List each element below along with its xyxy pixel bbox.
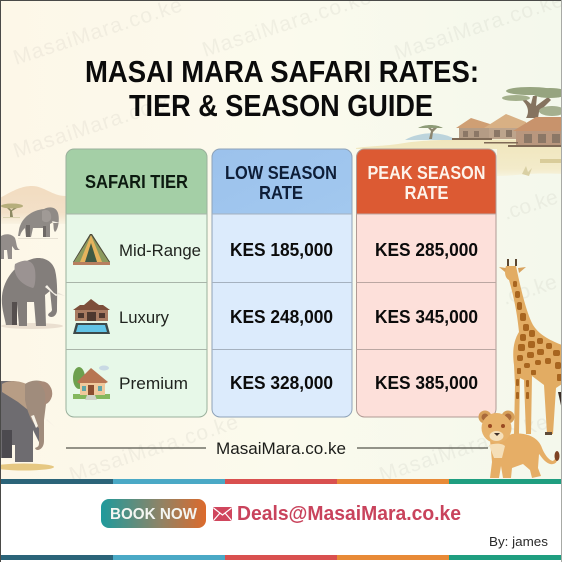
author credit: By: james <box>489 535 548 549</box>
label: luxury: Luxury <box>119 308 169 327</box>
illustration: far elephant <box>18 207 60 239</box>
icon: tent <box>73 234 110 265</box>
title: MASAI MARA SAFARI RATES: <box>85 54 479 89</box>
illustration: lodges and savanna <box>356 87 562 176</box>
heading: peak season rate <box>368 163 486 203</box>
low season prices: KES 185,000 <box>230 240 333 260</box>
heading: low season rate <box>225 163 337 203</box>
color strip: top of footer <box>0 479 562 484</box>
contact email: Deals@MasaiMara.co.ke <box>237 503 461 525</box>
peak season prices: KES 345,000 <box>375 307 478 327</box>
panel: low season column <box>212 149 352 417</box>
button: book now: BOOK NOW <box>110 506 197 523</box>
illustration: giraffe <box>499 259 562 435</box>
color strip: bottom of footer <box>0 555 562 560</box>
divider with site name: MasaiMara.co.ke <box>216 439 346 458</box>
label: mid-range: Mid-Range <box>119 241 201 260</box>
peak season prices: KES 385,000 <box>375 373 478 393</box>
peak season prices <box>375 240 478 393</box>
low season prices: KES 248,000 <box>230 307 333 327</box>
heading: peak season rate: PEAK SEASON <box>368 163 486 183</box>
low season prices <box>230 240 333 393</box>
watermarks: .co.ke <box>499 271 560 310</box>
illustration: small acacia <box>1 204 23 218</box>
illustration: front elephant <box>0 381 55 470</box>
illustration: lion cub <box>478 410 560 478</box>
watermarks: MasaiMara.co.ke <box>10 86 185 163</box>
watermarks: MasaiMara.co.ke <box>66 410 241 487</box>
panel: safari tier column <box>66 149 207 417</box>
label: premium: Premium <box>119 374 188 393</box>
panel: peak season column <box>356 149 496 417</box>
watermarks: .co.ke <box>500 186 561 225</box>
illustration: left hills <box>0 186 66 224</box>
peak season prices: KES 285,000 <box>375 240 478 260</box>
icon: luxury lodge with pool <box>73 299 110 334</box>
heading: low season rate: RATE <box>259 183 303 203</box>
illustration: young elephant <box>1 234 20 259</box>
heading: safari tier: SAFARI TIER <box>85 172 188 192</box>
button: book now <box>101 499 206 528</box>
heading: low season rate: LOW SEASON <box>225 163 337 183</box>
watermarks: MasaiMara.co.ke <box>376 410 551 487</box>
icon: premium house <box>73 366 110 400</box>
title <box>85 54 479 123</box>
low season prices: KES 328,000 <box>230 373 333 393</box>
footer background <box>0 484 562 562</box>
heading: peak season rate: RATE <box>404 183 448 203</box>
title: TIER & SEASON GUIDE <box>129 88 433 123</box>
illustration: large elephant <box>1 258 65 329</box>
icon: envelope <box>213 507 232 521</box>
